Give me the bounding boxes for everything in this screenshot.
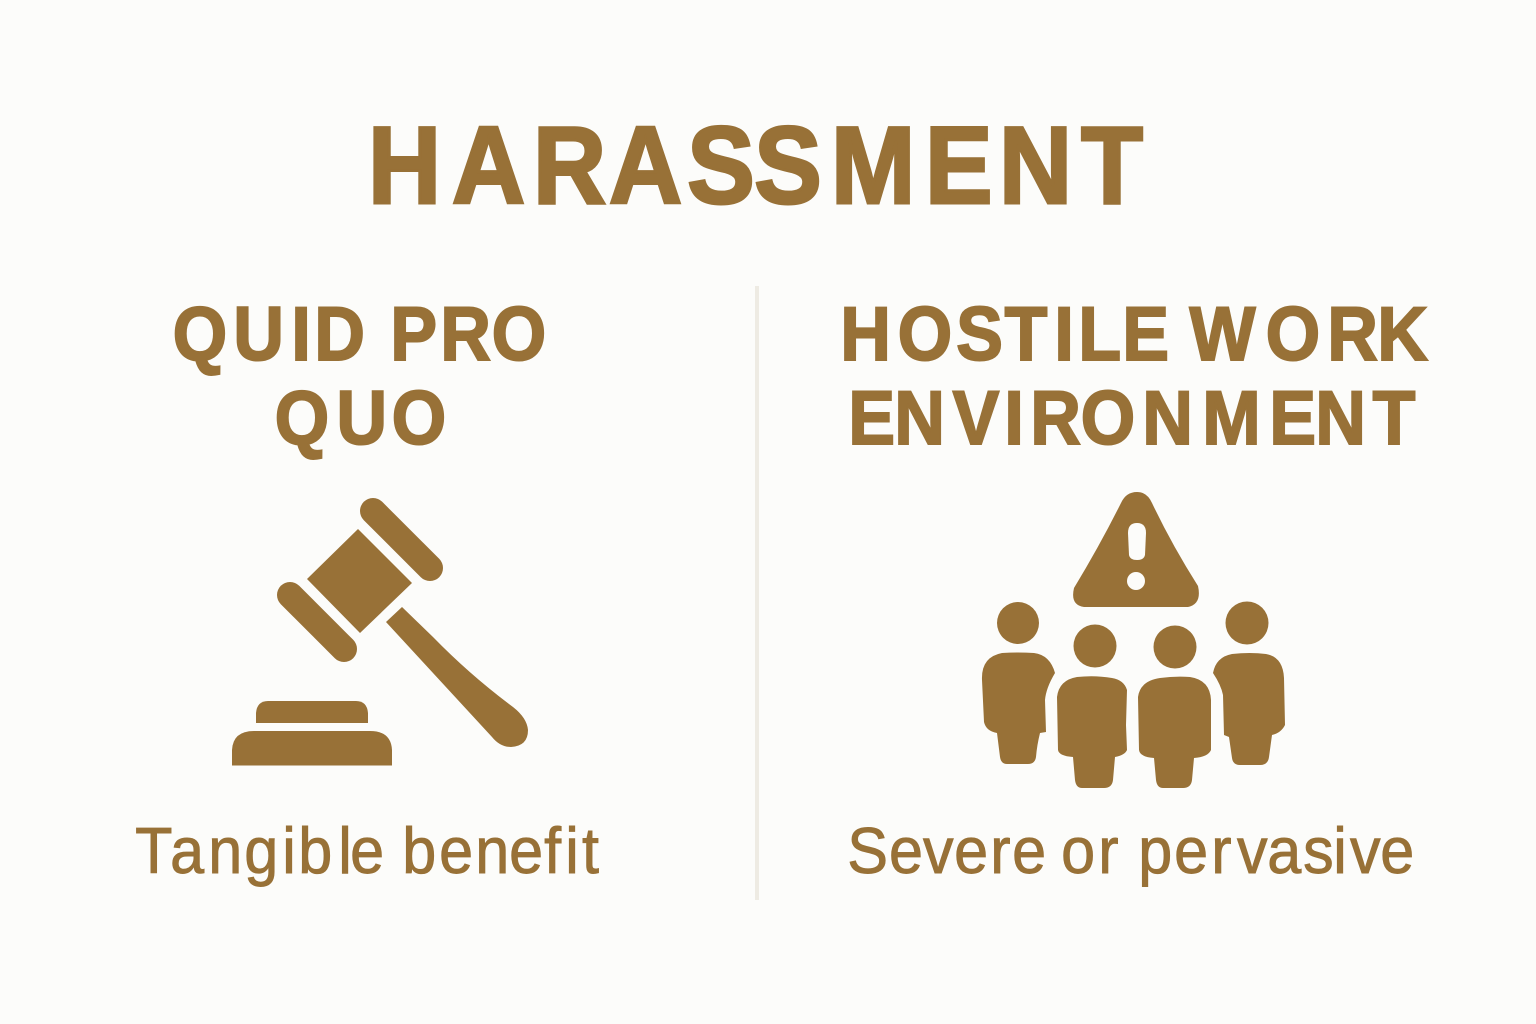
icon: warning triangle <box>1073 492 1199 607</box>
title: HARASSMENT <box>368 104 1143 227</box>
heading: hostile work environment <box>840 292 1428 461</box>
heading: hostile work environment: ENVIRONMENT <box>848 376 1415 461</box>
heading: quid pro quo <box>173 292 546 461</box>
heading: quid pro quo: QUID PRO <box>173 292 546 377</box>
heading: hostile work environment: HOSTILE WORK <box>840 292 1428 377</box>
icon: gavel <box>232 511 528 766</box>
icon: group of people <box>982 602 1285 788</box>
caption: tangible benefit: Tangible benefit <box>135 815 599 887</box>
caption: severe or pervasive: Severe or pervasive <box>847 815 1414 887</box>
heading: quid pro quo: QUO <box>275 376 446 461</box>
